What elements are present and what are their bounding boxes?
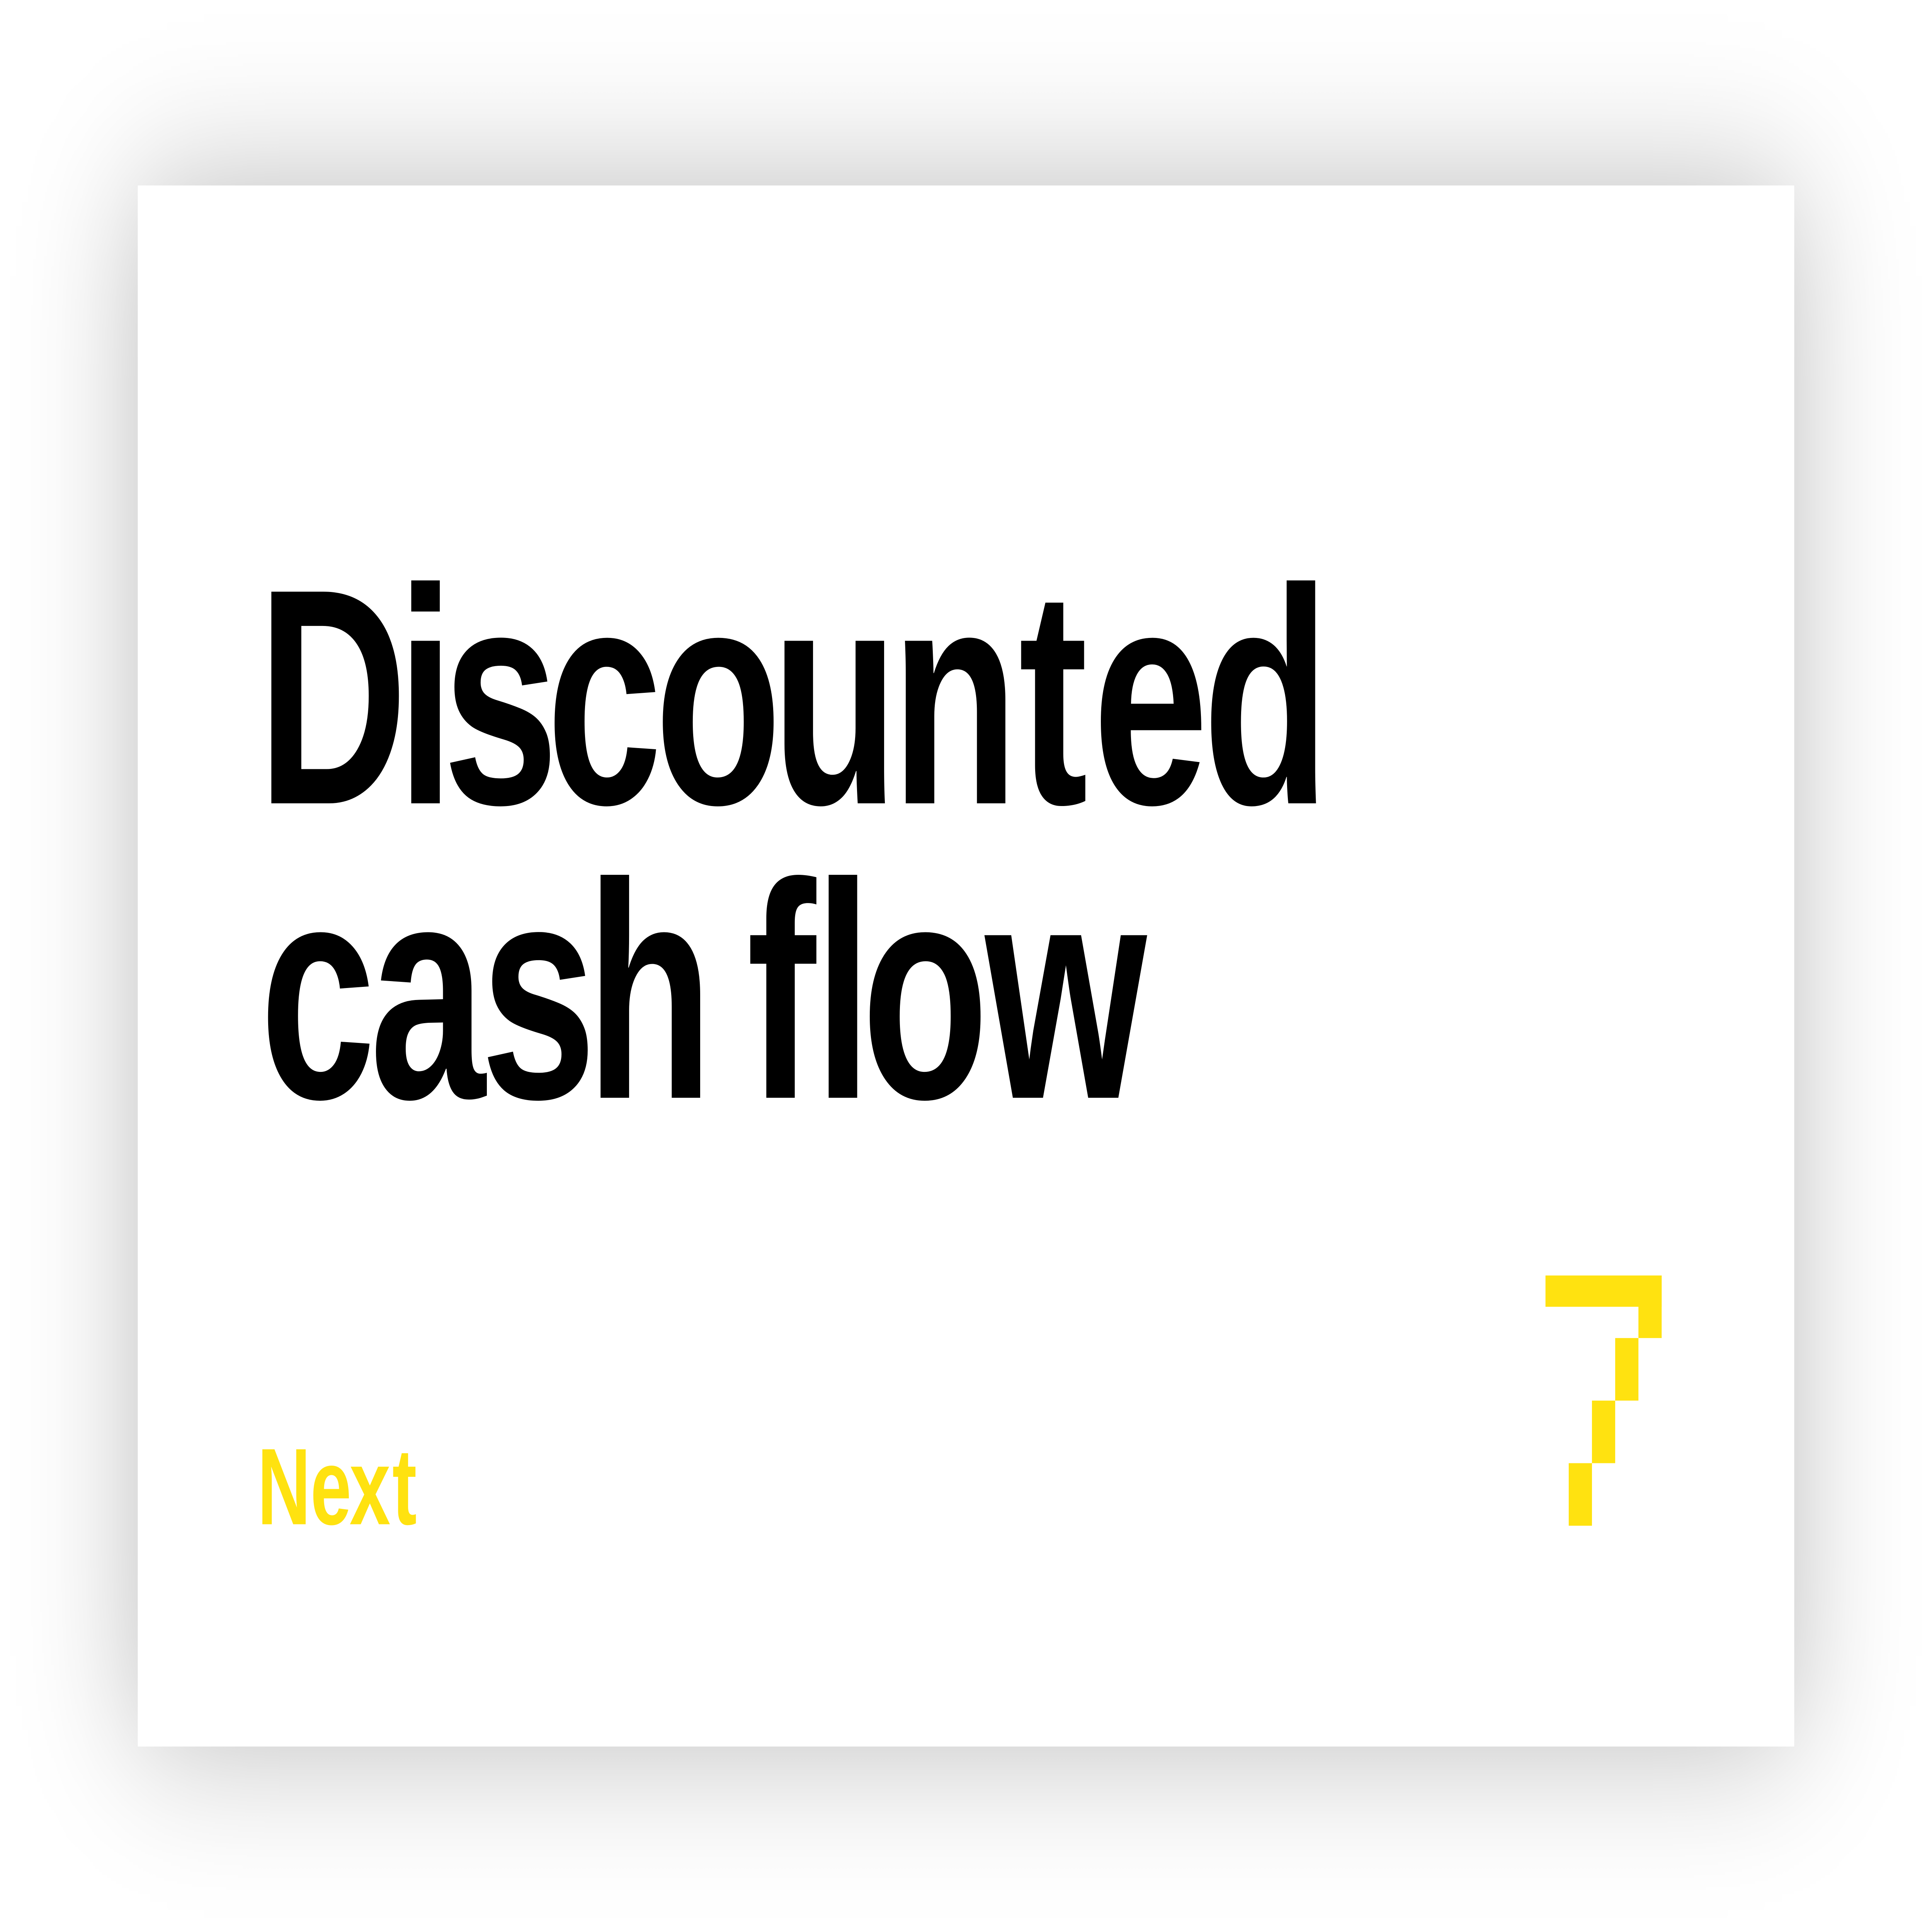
icon: pixel seven — [1546, 1276, 1662, 1526]
title line 1: Discounted — [257, 526, 1330, 869]
panel: white card — [138, 185, 1794, 1747]
next label: Next — [257, 1425, 417, 1548]
title line 2: cash flow — [260, 820, 1148, 1163]
title — [257, 526, 1330, 1163]
